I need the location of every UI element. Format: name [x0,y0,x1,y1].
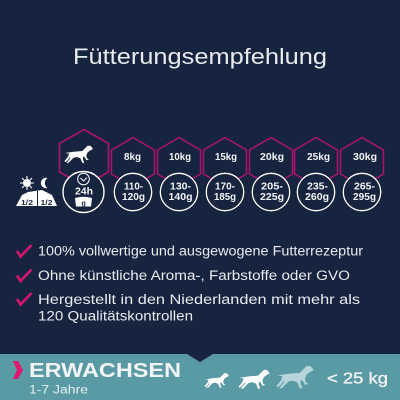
column: 20kg: 225g [260,192,284,203]
column: 8kg: 8kg [124,152,141,163]
half portion labels: 1/2 [40,198,52,207]
icon: food bowl [75,197,92,206]
icon: small dog [205,373,229,388]
column: 8kg [112,138,154,211]
icon: moon [41,178,48,188]
column: 30kg [340,138,384,211]
column: 10kg: 130- [170,182,191,192]
icon: check 2 [17,270,32,281]
icon: dog [64,146,93,163]
benefits list: 120 Qualitätskontrollen [38,308,193,324]
icon: large dog [277,366,314,388]
half portion labels [21,191,52,207]
benefits list [17,244,364,324]
half portion labels: 1/2 [21,198,33,207]
column: 30kg: 30kg [353,152,377,163]
icon: medium dog [239,370,270,389]
column: 20kg: 20kg [260,152,284,163]
circle: 24h daily ration [63,172,104,212]
benefit 3: Hergestellt in den Niederlanden mit mehr als [38,292,360,307]
column: 15kg: 15kg [215,152,237,163]
age range: 1-7 Jahre [29,384,88,396]
column: 15kg [204,138,246,211]
column: 25kg: 25kg [307,152,330,163]
icon: check 3 [17,293,32,304]
icon: half portion bowl [16,190,57,206]
weight limit: < 25 kg [327,370,388,388]
icon: clock [78,173,89,185]
life stage heading: ERWACHSEN [29,359,181,382]
24h label: 24h [75,186,93,198]
column: 20kg [250,138,292,211]
icon: check 1 [17,245,32,256]
footer band [0,354,400,400]
icon: sun [20,176,34,190]
benefit 1: 100% vollwertige und ausgewogene Futterrezeptur [38,244,364,258]
column: 25kg: 260g [305,192,329,203]
column: 10kg: 140g [168,192,192,203]
circle: 24h daily ration: g [82,200,86,208]
column: 10kg: 10kg [169,152,191,163]
column: 30kg: 265- [354,182,375,192]
title: Fütterungsempfehlung [73,44,327,69]
column: 25kg [294,138,338,211]
feeding table [16,130,384,212]
column: 15kg: 170- [215,182,235,192]
column: 8kg: 120g [122,192,145,203]
column: 8kg: 110- [124,182,143,192]
icon: day and night split [16,176,57,207]
column: 30kg: 295g [353,192,376,203]
icon: chevron [13,361,23,379]
hexagon: dog [60,130,108,186]
column: 25kg: 235- [307,182,328,192]
column: 10kg [158,138,200,211]
column: 20kg: 205- [261,182,283,192]
column: 15kg: 185g [214,192,236,203]
benefit 2: Ohne künstliche Aroma-, Farbstoffe oder GVO [38,268,350,283]
